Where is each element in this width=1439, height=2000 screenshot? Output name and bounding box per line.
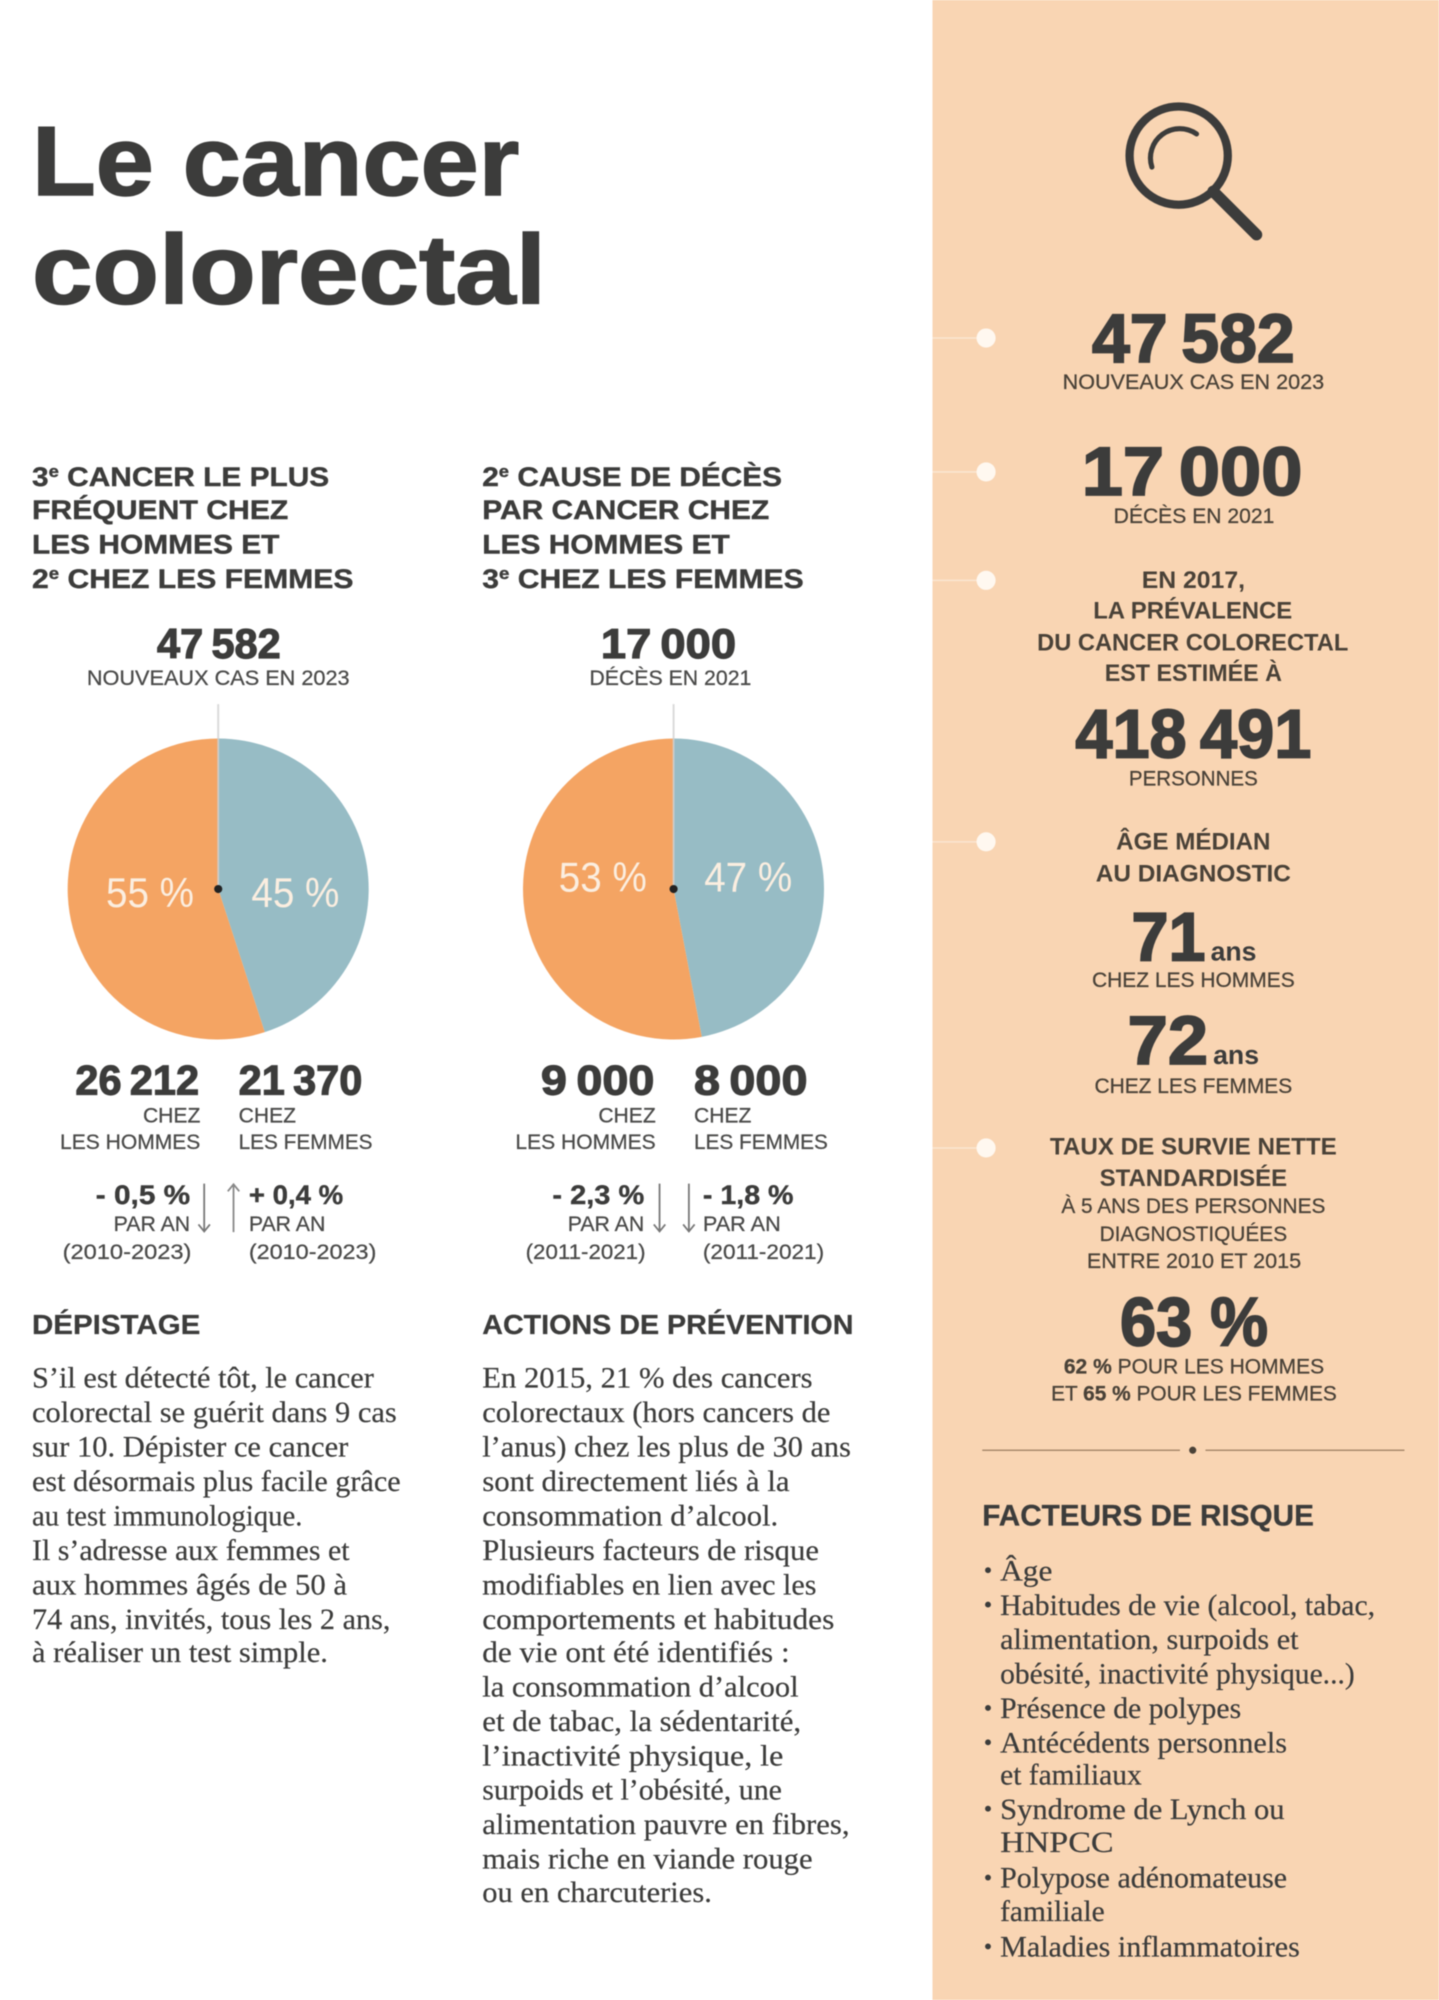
- stat: prevalence: LA PRÉVALENCE: [1093, 597, 1292, 624]
- stat: median age: 72: [1128, 1002, 1208, 1079]
- stat: survival rate: ENTRE 2010 ET 2015: [1087, 1250, 1301, 1273]
- stat: median age: ÂGE MÉDIAN: [1116, 827, 1271, 854]
- figure: deaths among men: [515, 1056, 656, 1154]
- stat: survival rate: [1050, 1133, 1337, 1406]
- heading: third most frequent cancer: 3: [32, 462, 47, 492]
- trend: women, annual change: [703, 1180, 824, 1264]
- text block: prevention actions: comportements et habitudes: [482, 1604, 834, 1636]
- figure: new cases 2023: [87, 620, 350, 690]
- text block: risk factors: familiale: [1000, 1896, 1105, 1928]
- pie chart: deaths by sex: 53 %: [559, 854, 647, 901]
- figure: new cases among men: 26 212: [75, 1056, 199, 1103]
- text block: screening: S’il est détecté tôt, le cancer: [32, 1363, 374, 1395]
- panel: incidence column: [32, 462, 376, 1264]
- trend: men, annual change: PAR AN: [114, 1213, 190, 1236]
- text block: screening: sur 10. Dépister ce cancer: [32, 1432, 349, 1464]
- trend: women, annual change: (2011-2021): [703, 1241, 824, 1264]
- figure: new cases among men: CHEZ: [143, 1104, 201, 1127]
- stat: survival rate: 62 % POUR LES HOMMES: [1064, 1356, 1324, 1379]
- figure: new cases 2023: 47 582: [157, 620, 281, 667]
- trend: men, annual change: [526, 1180, 646, 1264]
- stat: prevalence: EN 2017,: [1142, 567, 1245, 593]
- figure: new cases among women: 21 370: [239, 1056, 362, 1103]
- figure: deaths among women: CHEZ: [694, 1104, 752, 1127]
- stat: median age: ans: [1211, 936, 1256, 966]
- text block: screening: à réaliser un test simple.: [32, 1637, 328, 1669]
- text block: prevention actions: surpoids et l’obésité, une: [482, 1775, 782, 1807]
- text block: risk factors: HNPCC: [1000, 1827, 1114, 1859]
- arrow: women increasing: [228, 1184, 239, 1232]
- stat: prevalence: [1037, 567, 1348, 791]
- stat: survival rate: TAUX DE SURVIE NETTE: [1050, 1133, 1337, 1159]
- figure: new cases among men: LES HOMMES: [60, 1131, 200, 1154]
- text block: risk factors: [982, 1500, 1375, 1964]
- stat: survival rate: ET 65 % POUR LES FEMMES: [1051, 1383, 1337, 1406]
- panel: mortality column: [482, 461, 828, 1264]
- title: Le cancer: [32, 106, 519, 216]
- text block: screening: aux hommes âgés de 50 à: [32, 1569, 347, 1601]
- stat: median age: CHEZ LES FEMMES: [1094, 1075, 1292, 1098]
- stat: survival rate: 63 %: [1120, 1284, 1268, 1361]
- trend: men, annual change: (2010-2023): [63, 1241, 191, 1264]
- stat: prevalence: EST ESTIMÉE À: [1105, 659, 1282, 686]
- heading: second cause of cancer death: 2: [482, 462, 497, 492]
- text block: screening: [32, 1309, 401, 1669]
- text block: prevention actions: ACTIONS DE PRÉVENTION: [482, 1309, 853, 1340]
- heading: second cause of cancer death: PAR CANCER CHEZ: [482, 495, 769, 525]
- text block: risk factors: Polypose adénomateuse: [1000, 1863, 1287, 1895]
- text block: prevention actions: Plusieurs facteurs de risque: [482, 1535, 819, 1567]
- heading: third most frequent cancer: CANCER LE PLUS: [59, 462, 329, 492]
- text block: screening: au test immunologique.: [32, 1501, 302, 1533]
- text block: risk factors: Âge: [1000, 1554, 1052, 1587]
- text block: risk factors: Syndrome de Lynch ou: [1000, 1794, 1285, 1826]
- pie chart: new cases by sex: 45 %: [251, 869, 339, 916]
- stat: deaths: DÉCÈS EN 2021: [1114, 505, 1274, 528]
- stat: prevalence: PERSONNES: [1129, 768, 1258, 791]
- arrow: men decreasing: [654, 1184, 665, 1232]
- heading: third most frequent cancer: CHEZ LES FEMMES: [59, 564, 353, 594]
- heading: second cause of cancer death: CHEZ LES FEMMES: [509, 564, 804, 594]
- pie chart: new cases by sex: 55 %: [106, 869, 194, 916]
- text block: screening: colorectal se guérit dans 9 cas: [32, 1397, 397, 1429]
- trend: men, annual change: (2011-2021): [526, 1241, 646, 1264]
- figure: new cases among men: [60, 1056, 201, 1154]
- text block: prevention actions: consommation d’alcool.: [482, 1501, 778, 1533]
- heading: third most frequent cancer: LES HOMMES ET: [32, 530, 280, 560]
- text block: prevention actions: l’anus) chez les plus de 30 ans: [482, 1432, 851, 1464]
- heading: third most frequent cancer: [32, 462, 353, 594]
- text block: prevention actions: En 2015, 21 % des cancers: [482, 1363, 813, 1395]
- text block: screening: est désormais plus facile grâce: [32, 1466, 401, 1498]
- figure: new cases among women: LES FEMMES: [239, 1131, 373, 1154]
- stat: prevalence: DU CANCER COLORECTAL: [1037, 630, 1348, 656]
- figure: new cases among women: [239, 1056, 373, 1154]
- heading: third most frequent cancer: e: [49, 462, 59, 481]
- figure: deaths among women: LES FEMMES: [694, 1131, 828, 1154]
- figure: deaths 2021: DÉCÈS EN 2021: [589, 667, 751, 690]
- figure: new cases among women: CHEZ: [239, 1104, 296, 1127]
- arrow: women decreasing: [683, 1184, 695, 1232]
- text block: prevention actions: de vie ont été identifiés :: [482, 1637, 790, 1669]
- text block: prevention actions: sont directement liés à la: [482, 1466, 790, 1498]
- text block: prevention actions: alimentation pauvre en fibres,: [482, 1809, 850, 1841]
- stat: prevalence: 418 491: [1075, 696, 1311, 773]
- stat: deaths: 17 000: [1082, 433, 1302, 510]
- title: colorectal: [32, 215, 546, 325]
- trend: men, annual change: PAR AN: [568, 1213, 644, 1236]
- stat: median age: CHEZ LES HOMMES: [1092, 969, 1295, 992]
- text block: risk factors: alimentation, surpoids et: [1000, 1624, 1299, 1656]
- text block: screening: 74 ans, invités, tous les 2 ans,: [32, 1604, 390, 1636]
- title: [32, 106, 546, 325]
- stat: median age: AU DIAGNOSTIC: [1096, 860, 1291, 886]
- pie chart: new cases by sex: [68, 704, 369, 1040]
- heading: second cause of cancer death: [482, 461, 804, 594]
- text block: prevention actions: ou en charcuteries.: [482, 1877, 712, 1909]
- text block: screening: Il s’adresse aux femmes et: [32, 1535, 350, 1567]
- stat: median age: 71: [1131, 898, 1205, 975]
- heading: third most frequent cancer: FRÉQUENT CHEZ: [32, 494, 288, 525]
- trend: women, annual change: - 1,8 %: [703, 1180, 794, 1210]
- heading: second cause of cancer death: CAUSE DE DÉCÈS: [509, 461, 782, 492]
- figure: deaths among women: 8 000: [694, 1056, 808, 1103]
- figure: deaths among women: [694, 1056, 828, 1154]
- panel: key figures sidebar background: [933, 0, 1439, 2000]
- heading: second cause of cancer death: LES HOMMES ET: [482, 530, 730, 560]
- heading: third most frequent cancer: e: [49, 564, 59, 583]
- text block: prevention actions: mais riche en viande rouge: [482, 1844, 813, 1876]
- text block: risk factors: Maladies inflammatoires: [1000, 1932, 1300, 1964]
- heading: third most frequent cancer: 2: [32, 564, 47, 594]
- text block: prevention actions: et de tabac, la sédentarité,: [482, 1706, 801, 1738]
- stat: new cases: NOUVEAUX CAS EN 2023: [1063, 371, 1324, 394]
- timeline markers: [933, 328, 996, 1158]
- pie chart: deaths by sex: 47 %: [704, 854, 792, 901]
- icon: magnifying glass: [1130, 107, 1256, 235]
- stat: median age: ans: [1213, 1040, 1259, 1070]
- figure: deaths among men: CHEZ: [598, 1104, 656, 1127]
- text block: prevention actions: modifiables en lien avec les: [482, 1569, 816, 1601]
- trend: women, annual change: + 0,4 %: [249, 1180, 343, 1210]
- trend: men, annual change: [63, 1180, 191, 1264]
- stat: median age: [1092, 827, 1295, 1098]
- text block: prevention actions: l’inactivité physique, le: [482, 1740, 783, 1772]
- trend: women, annual change: PAR AN: [249, 1213, 325, 1236]
- trend: women, annual change: PAR AN: [703, 1213, 781, 1236]
- stat: survival rate: STANDARDISÉE: [1100, 1164, 1287, 1191]
- text block: risk factors: Présence de polypes: [1000, 1693, 1241, 1725]
- text block: risk factors: et familiaux: [1000, 1759, 1142, 1791]
- figure: deaths 2021: [589, 620, 751, 690]
- text block: screening: DÉPISTAGE: [32, 1309, 200, 1340]
- heading: second cause of cancer death: e: [499, 462, 509, 481]
- text block: risk factors: Antécédents personnels: [1000, 1728, 1287, 1760]
- heading: second cause of cancer death: e: [499, 564, 509, 583]
- text block: risk factors: obésité, inactivité physique...): [1000, 1659, 1355, 1691]
- stat: survival rate: À 5 ANS DES PERSONNES: [1061, 1195, 1325, 1218]
- pie chart: deaths by sex: [523, 704, 824, 1040]
- text block: risk factors: Habitudes de vie (alcool, tabac,: [1000, 1590, 1375, 1622]
- figure: deaths among men: LES HOMMES: [515, 1131, 656, 1154]
- arrow: men decreasing: [198, 1184, 210, 1232]
- trend: women, annual change: (2010-2023): [249, 1241, 376, 1264]
- text block: prevention actions: la consommation d’alcool: [482, 1671, 799, 1703]
- stat: new cases: 47 582: [1092, 300, 1295, 377]
- figure: new cases 2023: NOUVEAUX CAS EN 2023: [87, 667, 350, 690]
- heading: second cause of cancer death: 3: [482, 564, 497, 594]
- text block: risk factors: FACTEURS DE RISQUE: [982, 1500, 1314, 1533]
- trend: men, annual change: - 2,3 %: [552, 1180, 644, 1210]
- trend: men, annual change: - 0,5 %: [96, 1180, 190, 1210]
- trend: women, annual change: [249, 1180, 376, 1264]
- text block: prevention actions: [482, 1309, 853, 1909]
- text block: prevention actions: colorectaux (hors cancers de: [482, 1397, 830, 1429]
- figure: deaths 2021: 17 000: [601, 620, 736, 667]
- stat: survival rate: DIAGNOSTIQUÉES: [1100, 1223, 1287, 1246]
- stat: new cases: [1063, 300, 1324, 394]
- figure: deaths among men: 9 000: [541, 1056, 654, 1103]
